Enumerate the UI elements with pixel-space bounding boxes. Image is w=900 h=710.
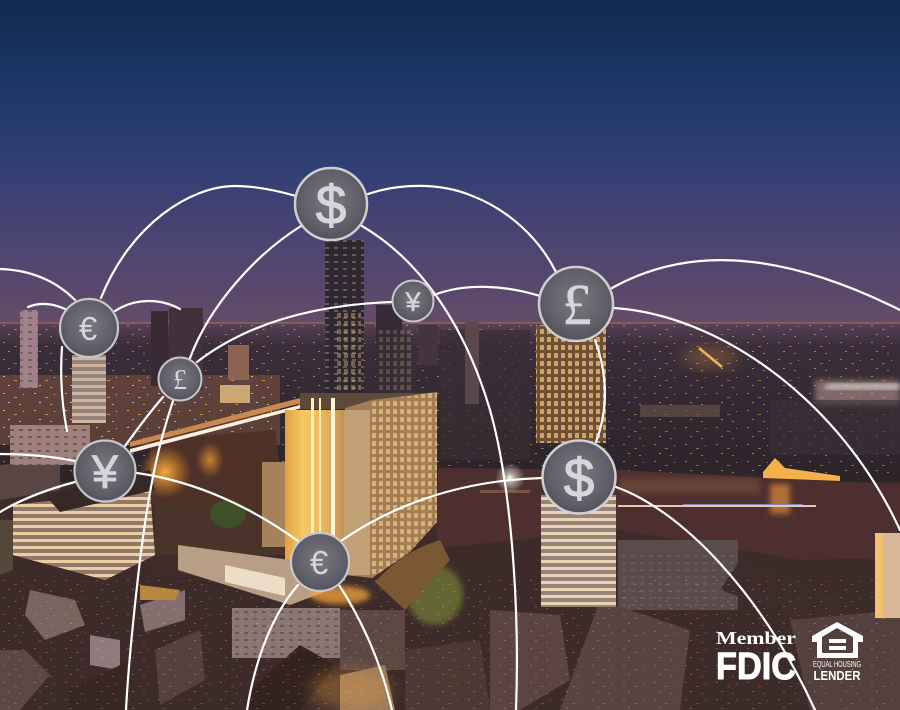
- tower below the lower dollar coin: [541, 495, 616, 607]
- logo: Equal Housing Lender: LENDER: [814, 668, 861, 683]
- coin: lower euro: €: [310, 544, 328, 581]
- distant city at the horizon: [0, 322, 900, 482]
- coin: small yen: [392, 280, 434, 322]
- sky background: [0, 0, 900, 326]
- coin: lower euro: [291, 533, 349, 591]
- coin: large dollar: [295, 168, 367, 240]
- tower behind the large pound coin: [536, 325, 606, 443]
- coin: large pound: £: [562, 272, 592, 337]
- light glint on arc crossing: [495, 463, 525, 493]
- coin: small yen: ¥: [404, 287, 421, 317]
- logo: Member FDIC: FDIC: [716, 646, 796, 688]
- coin: lower dollar: $: [564, 447, 594, 509]
- coin: euro upper left: €: [79, 310, 97, 347]
- coin: euro upper left: [60, 299, 118, 357]
- left foreground buildings: [0, 308, 302, 580]
- coin: lower dollar: [542, 440, 616, 514]
- logo: Member FDIC: Member: [716, 628, 796, 648]
- logo: Member FDIC: [716, 628, 796, 688]
- foreground rooftops: [0, 500, 900, 710]
- coin: small pound: £: [173, 365, 187, 396]
- skyscrapers right of centre: [376, 305, 479, 404]
- network arcs: [0, 186, 900, 710]
- central skyscraper: [325, 240, 364, 395]
- river: [139, 430, 900, 560]
- coin: large pound: [539, 267, 613, 341]
- coin: yen: ¥: [91, 445, 119, 498]
- ground base: [0, 320, 900, 710]
- logo: Equal Housing Lender: EQUAL HOUSING: [813, 660, 861, 669]
- coin: yen: [74, 440, 136, 502]
- coin: small pound: [158, 358, 202, 400]
- logo: Equal Housing Lender: [812, 622, 863, 683]
- icon: house: [812, 622, 863, 658]
- coin: large dollar: $: [316, 174, 346, 236]
- central hotel: [178, 392, 450, 610]
